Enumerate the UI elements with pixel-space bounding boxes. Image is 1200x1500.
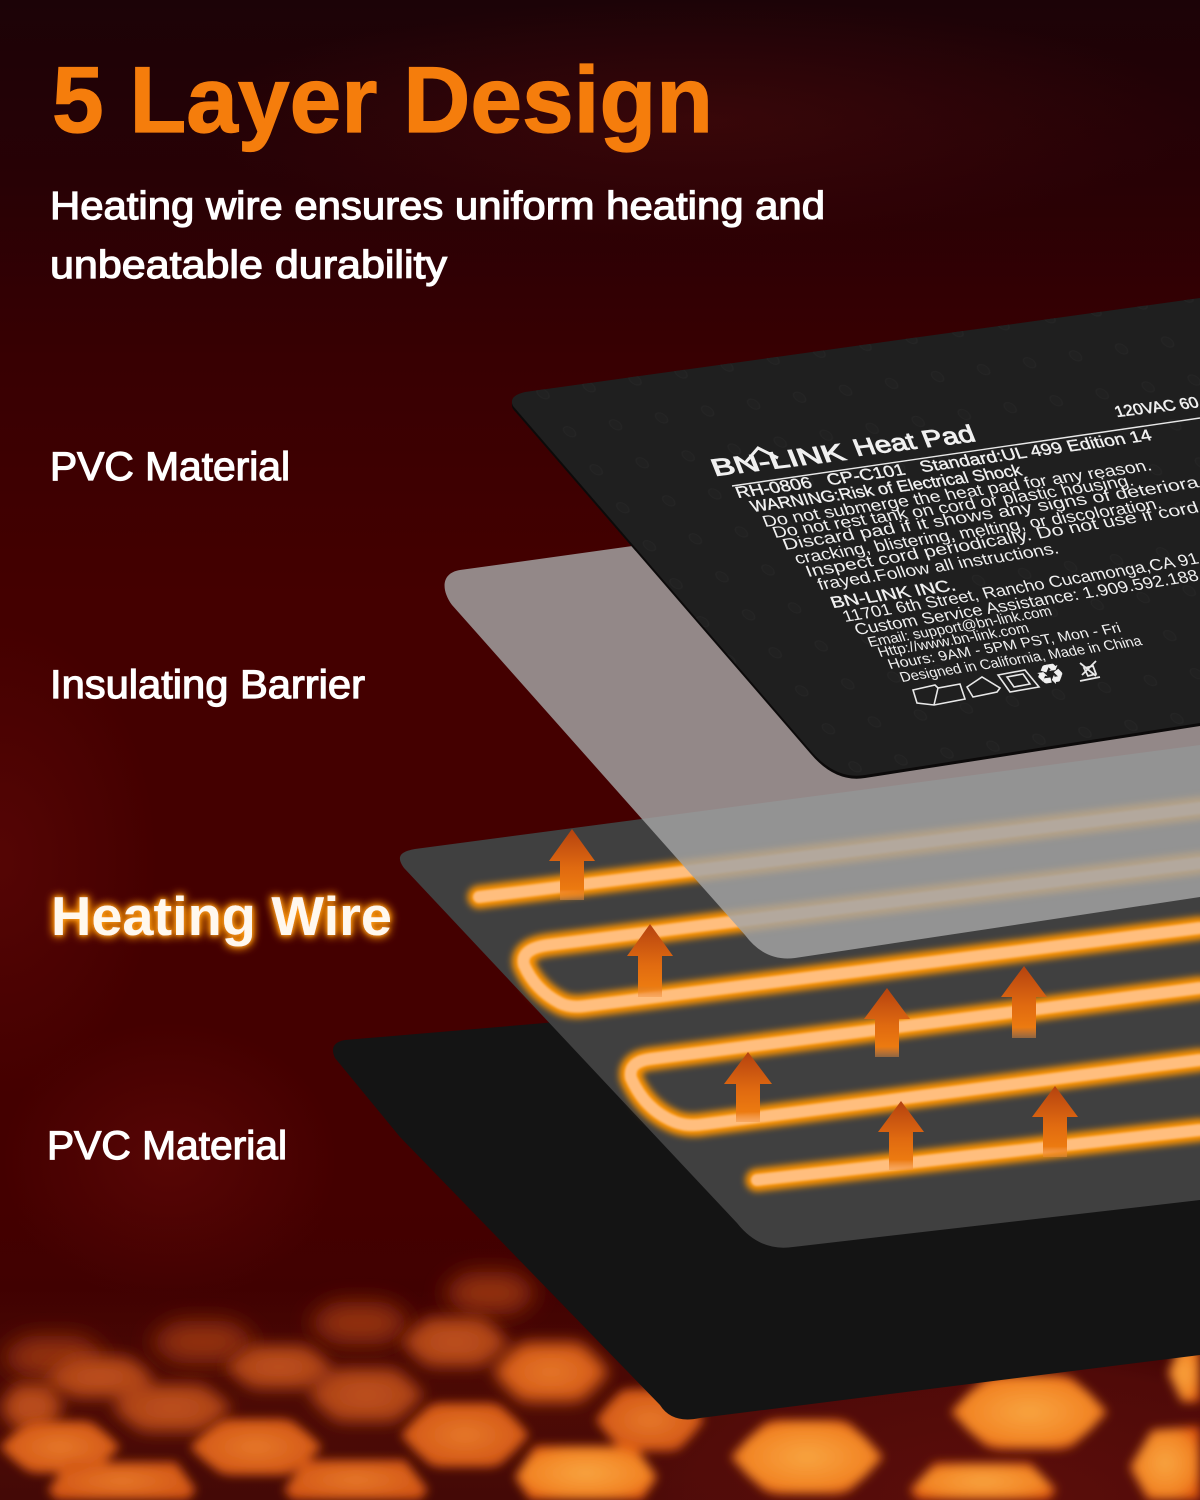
logo: BN-LINK bbox=[707, 439, 849, 482]
model and warnings: Inspect cord periodically. Do not use if cord bbox=[803, 499, 1200, 581]
model and warnings: Do not rest tank on cord or plastic housing. bbox=[770, 472, 1137, 542]
model and warnings: Discard pad if it shows any signs of deteriora bbox=[780, 474, 1200, 554]
title: 5 Layer Design bbox=[52, 47, 713, 152]
pad face bbox=[512, 298, 1200, 776]
label: PVC material bottom: PVC Material bbox=[47, 1124, 287, 1168]
layer: insulating barrier bbox=[445, 500, 1200, 959]
certification icons bbox=[913, 657, 1100, 705]
company details: Hours: 9AM - 5PM PST, Mon - Fri bbox=[885, 619, 1123, 672]
model and warnings: Do not submerge the heat pad for any reason. bbox=[760, 457, 1155, 531]
subtitle: unbeatable durability bbox=[50, 244, 448, 287]
company details: Http://www.bn-link.com bbox=[875, 620, 1031, 660]
logo bbox=[707, 439, 849, 482]
certification icons: ♻ bbox=[1032, 657, 1068, 693]
model and warnings: WARNING:Risk of Electrical Shock bbox=[748, 461, 1026, 516]
company details bbox=[828, 550, 1200, 685]
subtitle bbox=[50, 185, 825, 287]
model and warnings bbox=[733, 426, 1200, 594]
company details: Email: support@bn-link.com bbox=[865, 603, 1054, 650]
model and warnings: frayed.Follow all instructions. bbox=[815, 540, 1062, 594]
label: heating wire: Heating Wire bbox=[51, 885, 392, 947]
pad edge bbox=[512, 301, 1200, 779]
arrows: rising heat bbox=[549, 829, 1078, 1170]
rating: 120VAC 60 bbox=[1112, 395, 1200, 421]
company details: Custom Service Assistance: 1.909.592.188 bbox=[852, 567, 1200, 639]
subtitle: Heating wire ensures uniform heating and bbox=[50, 185, 825, 228]
company details: Designed in California, Made in China bbox=[897, 632, 1144, 685]
model and warnings: RH-0806 CP-C101 Standard:UL 499 Edition 14 bbox=[733, 426, 1155, 502]
label: PVC material top: PVC Material bbox=[50, 445, 290, 489]
layer: heating wire sheet bbox=[400, 745, 1200, 1248]
product name: Heat Pad bbox=[849, 421, 979, 462]
model and warnings: cracking, blistering, melting, or discoloration. bbox=[792, 495, 1165, 568]
layer: top PVC pad with printed label bbox=[512, 298, 1200, 779]
glowing honeycomb floor bbox=[0, 1272, 1200, 1500]
company details: 11701 6th Street, Rancho Cucamonga,CA 91 bbox=[840, 550, 1200, 626]
company details: BN-LINK INC. bbox=[828, 577, 959, 612]
sheet bbox=[400, 745, 1200, 1248]
layer: bottom PVC pad bbox=[333, 1015, 1200, 1419]
wire core bbox=[479, 808, 1200, 1180]
wire glow bbox=[479, 808, 1200, 1180]
label: insulating barrier: Insulating Barrier bbox=[50, 663, 365, 707]
